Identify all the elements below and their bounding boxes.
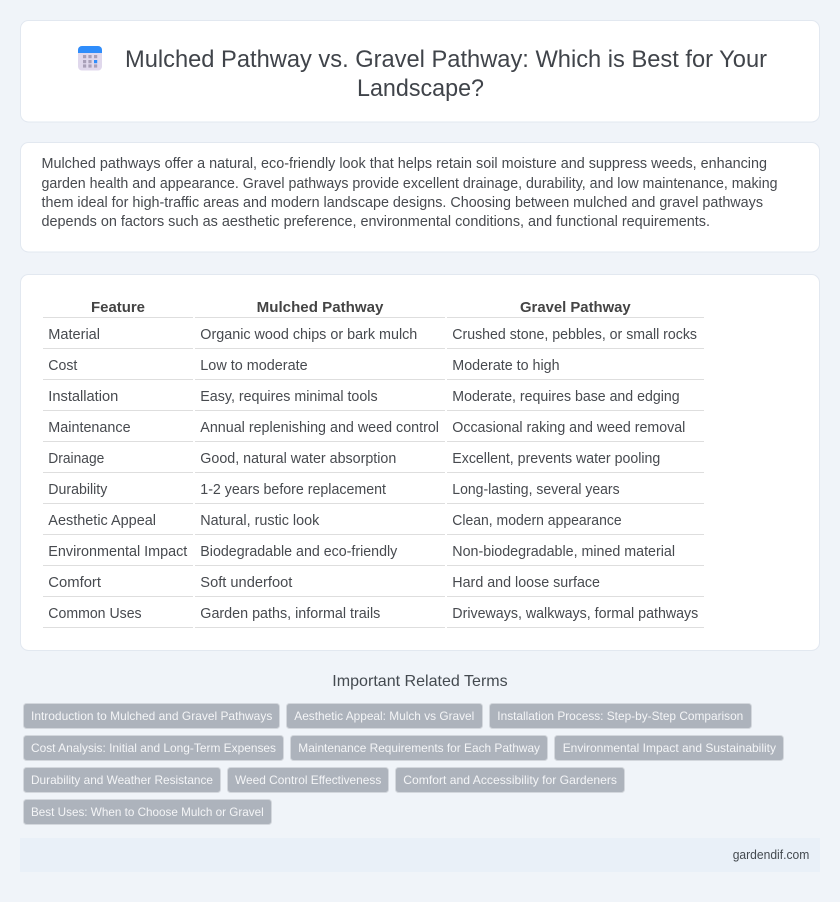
row: environmental impact [43,544,704,566]
row: cost: Cost [48,358,77,374]
footer domain: gardendif.com [733,847,809,862]
tag: durability: Durability and Weather Resistance [31,773,213,787]
related term tags [24,704,784,824]
row: aesthetic appeal [43,513,704,535]
tag: durability [24,768,220,792]
row: cost: Moderate to high [452,358,560,374]
row: aesthetic appeal: Clean, modern appearance [452,513,622,529]
row: comfort: Comfort [48,575,101,591]
title: Mulched Pathway vs. Gravel Pathway: Which is Best for Your [125,46,767,73]
row: cost [43,358,704,380]
heading: important related terms: Important Related Terms [332,673,508,690]
intro paragraph: depends on factors such as aesthetic preference, environmental conditions, and functional requirements. [42,214,710,230]
row: common uses: Common Uses [48,606,142,622]
intro paragraph: Mulched pathways offer a natural, eco-friendly look that helps retain soil moisture and suppress weeds, enhancing [42,156,767,172]
tag: weed control [228,768,388,792]
row: installation: Easy, requires minimal tools [200,389,378,405]
row: drainage [43,451,704,473]
tag: cost analysis: Cost Analysis: Initial and Long-Term Expenses [31,741,276,755]
tag: installation process: Installation Process: Step-by-Step Comparison [497,709,743,723]
row: installation [43,389,704,411]
intro paragraph [42,156,778,230]
row: drainage: Good, natural water absorption [200,451,396,467]
panel: header [20,20,820,122]
row: common uses: Garden paths, informal trails [200,606,380,622]
panel: introduction [20,142,820,252]
row: comfort: Soft underfoot [200,575,292,591]
title: Landscape? [357,75,484,102]
row: environmental impact: Environmental Impact [48,544,187,560]
row: drainage: Excellent, prevents water pooling [452,451,660,467]
row: comfort: Hard and loose surface [452,575,600,591]
tag: installation process [490,704,752,728]
tag: best uses [24,800,272,824]
table header: Feature [91,300,145,316]
row: environmental impact: Non-biodegradable, mined material [452,544,675,560]
tag: maintenance requirements [290,736,548,760]
tag: comfort and accessibility: Comfort and Accessibility for Gardeners [403,773,617,787]
row: maintenance: Annual replenishing and weed control [200,420,439,436]
row: installation: Moderate, requires base and edging [452,389,680,405]
row: material [43,327,704,349]
tag: best uses: Best Uses: When to Choose Mulch or Gravel [31,805,264,819]
row: durability [43,482,704,504]
row: environmental impact: Biodegradable and eco-friendly [200,544,398,560]
row: common uses [43,606,704,628]
row: material: Organic wood chips or bark mulch [200,327,417,343]
row: drainage: Drainage [48,451,104,467]
tag: environmental impact [554,736,784,760]
intro paragraph: garden health and appearance. Gravel pathways provide excellent drainage, durability, and low maintenance, making [42,176,778,192]
row: maintenance: Occasional raking and weed removal [452,420,685,436]
tag: aesthetic appeal: Aesthetic Appeal: Mulch vs Gravel [294,709,474,723]
tag: introduction [24,704,280,728]
tag: aesthetic appeal [286,704,482,728]
table header: Mulched Pathway [257,300,384,316]
row: aesthetic appeal: Aesthetic Appeal [48,513,156,529]
row: durability: Durability [48,482,108,498]
tag: maintenance requirements: Maintenance Requirements for Each Pathway [298,741,540,755]
table header: Gravel Pathway [520,300,631,316]
tag: cost analysis [24,736,284,760]
panel: comparison table [20,274,820,650]
row: material: Crushed stone, pebbles, or small rocks [452,327,697,343]
intro paragraph: them ideal for high-traffic areas and modern landscape designs. Choosing between mulched and gravel pathways [42,195,763,211]
table header [43,300,704,318]
icon: calendar [78,46,102,70]
tag: weed control: Weed Control Effectiveness [235,773,381,787]
row: material: Material [48,327,100,343]
row: durability: Long-lasting, several years [452,482,620,498]
tag: comfort and accessibility [396,768,624,792]
row: durability: 1-2 years before replacement [200,482,386,498]
row: comfort [43,575,704,597]
row: maintenance: Maintenance [48,420,131,436]
footer [20,838,820,872]
title [125,46,767,102]
tag: introduction: Introduction to Mulched and Gravel Pathways [31,709,272,723]
row: maintenance [43,420,704,442]
row: installation: Installation [48,389,118,405]
row: cost: Low to moderate [200,358,308,374]
row: aesthetic appeal: Natural, rustic look [200,513,320,529]
row: common uses: Driveways, walkways, formal pathways [452,606,698,622]
tag: environmental impact: Environmental Impact and Sustainability [563,741,776,755]
